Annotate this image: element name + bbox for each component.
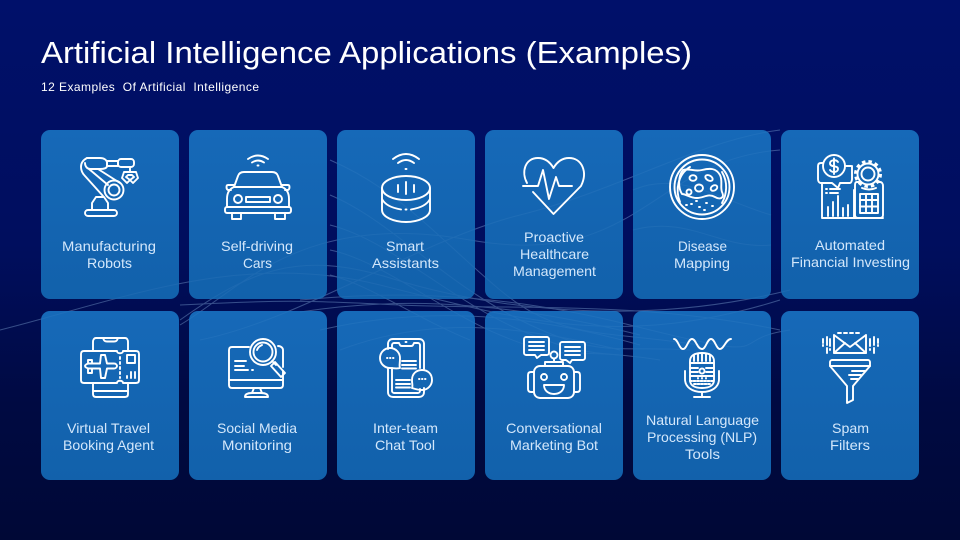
icon: travel booking phone ticket — [81, 338, 139, 397]
label: Manufacturing Robots — [62, 238, 156, 271]
label: Manufacturing Robots: Robots — [87, 255, 132, 271]
subtitle: 12 Examples Of Artificial Intelligence — [41, 80, 259, 94]
label: Conversational Marketing Bot — [506, 420, 602, 453]
icon: automated financial investing — [818, 155, 883, 218]
label: Natural Language Processing (NLP) Tools: Processing (NLP) — [647, 429, 757, 445]
label: Conversational Marketing Bot: Marketing Bot — [510, 437, 598, 453]
label: Self-driving Cars: Cars — [243, 255, 272, 271]
icon: conversational robot — [524, 337, 585, 398]
label: Self-driving Cars: Self-driving — [221, 238, 293, 254]
label: Automated Financial Investing — [791, 237, 910, 270]
icon: self-driving car — [225, 156, 291, 219]
label: Social Media Monitoring: Social Media — [217, 420, 297, 436]
icon: team chat phone — [380, 339, 432, 397]
label: Proactive Healthcare Management: Management — [513, 263, 596, 279]
label: Spam Filters — [830, 420, 870, 453]
label: Virtual Travel Booking Agent: Virtual Travel — [67, 420, 150, 436]
label: Disease Mapping: Disease — [678, 238, 727, 254]
label: Smart Assistants: Smart — [386, 238, 424, 254]
label: Spam Filters: Spam — [832, 420, 869, 436]
label: Social Media Monitoring — [217, 420, 297, 453]
icon: spam filter funnel — [823, 333, 878, 403]
label: Conversational Marketing Bot: Conversational — [506, 420, 602, 436]
label: Inter-team Chat Tool — [373, 420, 438, 453]
label: Virtual Travel Booking Agent: Booking Agent — [63, 437, 154, 453]
label: Smart Assistants — [372, 238, 439, 271]
label: Natural Language Processing (NLP) Tools: Natural Language — [646, 412, 759, 428]
label: Smart Assistants: Assistants — [372, 255, 439, 271]
icon: smart assistant speaker — [382, 154, 430, 222]
label: Spam Filters: Filters — [830, 437, 870, 453]
label: Inter-team Chat Tool: Chat Tool — [375, 437, 435, 453]
label: Natural Language Processing (NLP) Tools: Tools — [685, 446, 720, 462]
label: Disease Mapping — [674, 238, 730, 271]
label: Automated Financial Investing: Financial Investing — [791, 254, 910, 270]
icon: petri dish disease map — [670, 155, 734, 219]
label: Proactive Healthcare Management — [513, 229, 596, 279]
label: Natural Language Processing (NLP) Tools — [646, 412, 759, 462]
label: Manufacturing Robots: Manufacturing — [62, 238, 156, 254]
label: Social Media Monitoring: Monitoring — [222, 437, 292, 453]
icon: social media monitor magnifier — [229, 339, 285, 397]
label: Disease Mapping: Mapping — [674, 255, 730, 271]
label: Virtual Travel Booking Agent — [63, 420, 154, 453]
icon: manufacturing robot arm — [81, 158, 138, 216]
label: Proactive Healthcare Management: Healthcare — [520, 246, 589, 262]
label: Inter-team Chat Tool: Inter-team — [373, 420, 438, 436]
icon: voice waveform microphone — [674, 339, 731, 397]
label: Proactive Healthcare Management: Proactive — [524, 229, 584, 245]
label: Self-driving Cars — [221, 238, 293, 271]
icon: heart with pulse — [523, 158, 584, 214]
title: Artificial Intelligence Applications (Examples) — [41, 35, 692, 70]
label: Automated Financial Investing: Automated — [815, 237, 885, 253]
panel: card grid — [41, 130, 919, 480]
